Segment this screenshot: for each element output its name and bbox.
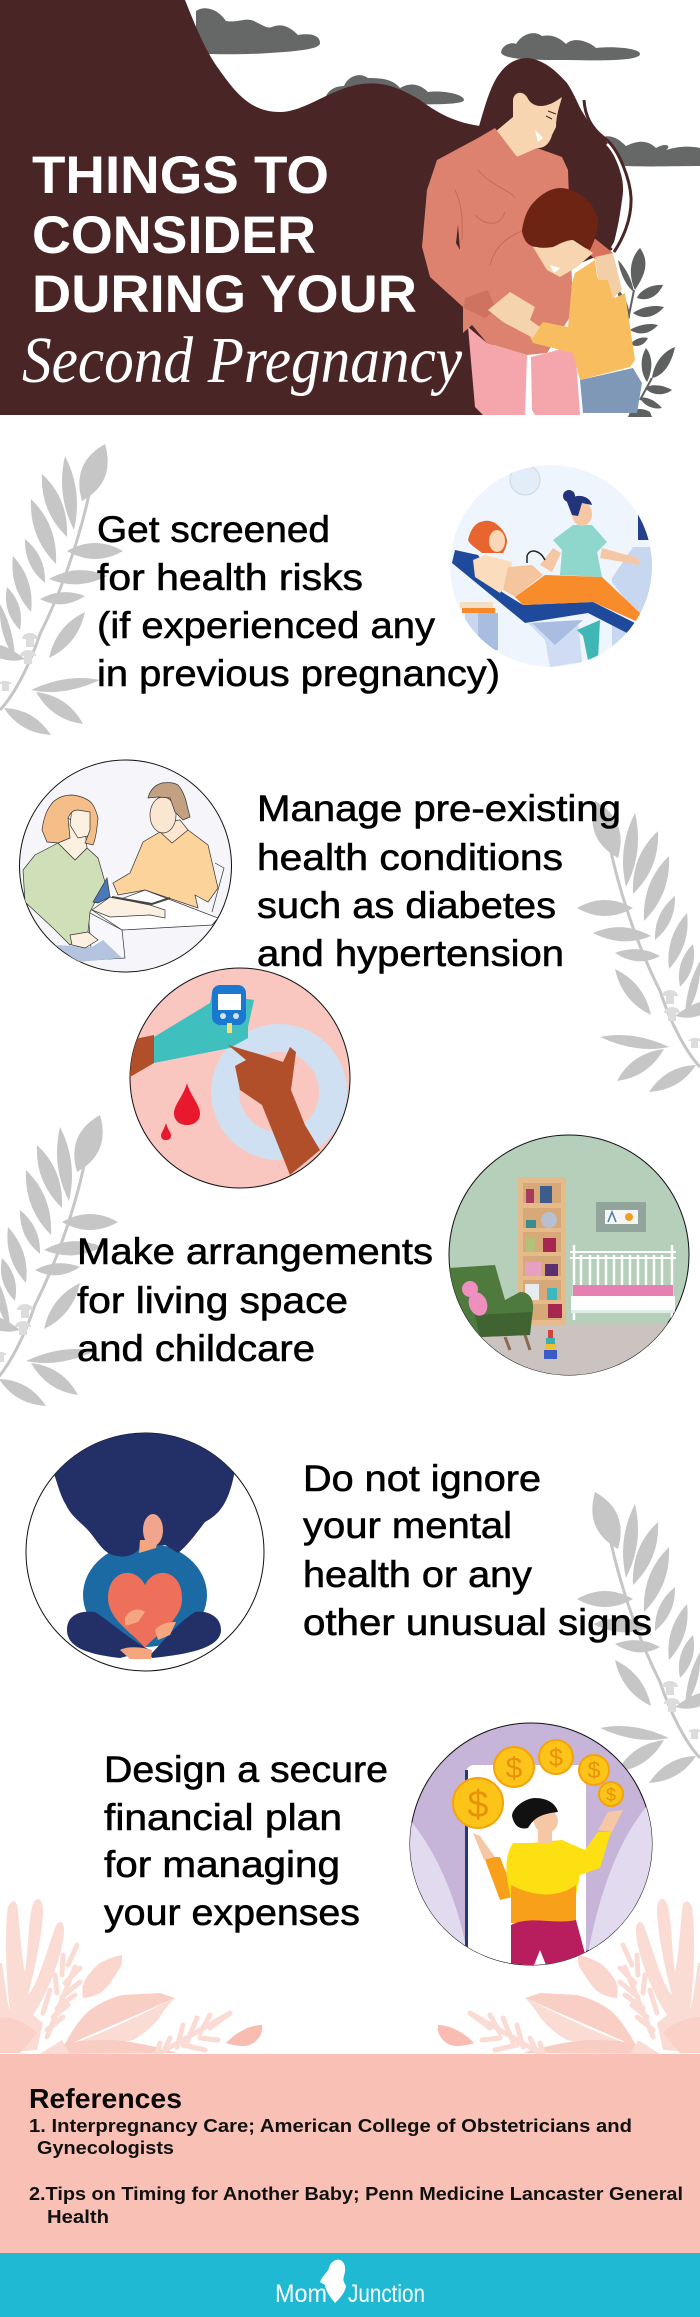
references panel: [0, 2054, 700, 2253]
hair: [478, 58, 623, 280]
reference 1: Gynecologists: [37, 2137, 174, 2158]
logo icon: [320, 2260, 346, 2303]
table: [92, 890, 218, 930]
legs: [67, 1612, 221, 1658]
table front: [88, 912, 125, 960]
point 2 text: such as diabetes: [257, 885, 556, 926]
toy stacker: [544, 1330, 557, 1359]
teal glove: [154, 993, 254, 1063]
probe: [527, 551, 545, 563]
reference 2: [29, 2183, 683, 2227]
ultrasound machine: [612, 547, 652, 617]
left arm: [130, 1035, 154, 1077]
coins: $: [549, 1744, 563, 1772]
hair outer strand: [584, 100, 631, 252]
title: THINGS TO: [32, 146, 329, 205]
blue ring: [225, 1038, 333, 1146]
illustration: glucose test: [130, 968, 350, 1188]
point 2 text: Manage pre-existing: [257, 788, 621, 829]
feet: [120, 1647, 152, 1659]
child smile: [550, 265, 560, 273]
neck: [139, 1540, 158, 1553]
point 5 text: financial plan: [104, 1797, 342, 1838]
woman's eye: [546, 111, 556, 119]
machine base: [612, 626, 630, 646]
woman's hand on belly: [488, 292, 540, 338]
point 4 text: Do not ignore: [303, 1458, 541, 1499]
title: [32, 146, 417, 324]
body: [83, 1543, 207, 1647]
bed: [452, 550, 635, 633]
pedestal shadow: [532, 620, 583, 645]
side table: [460, 602, 498, 650]
floor: [470, 1323, 668, 1375]
point 2 text: and hypertension: [257, 933, 564, 974]
fern: top left: [0, 444, 123, 735]
point 1 text: in previous pregnancy): [97, 653, 500, 694]
bookshelf: [518, 1177, 566, 1325]
bed pedestal: [528, 620, 582, 667]
phone: [466, 1765, 586, 1975]
jumper: [422, 128, 572, 355]
point 3 text: for living space: [77, 1280, 348, 1321]
reference 2: 2.Tips on Timing for Another Baby; Penn Medicine Lancaster General: [29, 2183, 683, 2204]
fern: third left: [0, 1115, 118, 1406]
crib: [570, 1245, 676, 1320]
logo: Mom: [275, 2280, 327, 2308]
point 3 text: [77, 1231, 433, 1369]
coins: [453, 1740, 623, 1828]
arm gap: [456, 225, 460, 250]
plant: [617, 248, 675, 417]
clouds: [196, 8, 700, 166]
patient: [23, 795, 165, 962]
reference 1: 1. Interpregnancy Care; American College of Obstetricians and: [29, 2115, 632, 2136]
picture frame: [596, 1202, 646, 1232]
woman's sleeve behind child: [585, 237, 613, 262]
illustration: nursery: [449, 1135, 690, 1378]
reference 2: Health: [47, 2206, 109, 2227]
fern: fourth right: [577, 1492, 700, 1783]
large blood drop: [174, 1083, 200, 1125]
hair: [40, 1433, 250, 1557]
logo: [275, 2260, 425, 2308]
patient hair: [468, 521, 507, 553]
machine top: [638, 514, 648, 540]
patient belly: [503, 565, 543, 597]
nurse: [540, 490, 640, 660]
illustration: woman hugging heart: [26, 1433, 264, 1671]
child jumper: [530, 260, 635, 380]
coins: $: [467, 1784, 489, 1826]
heart: [108, 1573, 182, 1648]
child face: [533, 240, 593, 277]
dark brown hill shape: [0, 0, 500, 415]
face: [143, 1514, 163, 1546]
point 2 text: health conditions: [257, 837, 563, 878]
point 5 text: your expenses: [104, 1892, 360, 1933]
coins: $: [588, 1757, 601, 1783]
chair: [212, 863, 224, 912]
illustration: blood pressure check: [20, 760, 232, 972]
point 4 text: other unusual signs: [303, 1602, 652, 1643]
point 1 text: (if experienced any: [97, 605, 436, 646]
small blood drop: [161, 1123, 171, 1140]
fern: second right: [577, 801, 700, 1092]
coins: $: [506, 1752, 523, 1785]
header banner: [0, 0, 700, 417]
hands: [125, 1610, 176, 1640]
pink leaves: right: [438, 1899, 700, 2054]
point 4 text: [303, 1458, 652, 1643]
patient legs: [515, 575, 642, 622]
illustration: ultrasound scan: [450, 465, 655, 667]
point 5 text: Design a secure: [104, 1749, 388, 1790]
point 4 text: health or any: [303, 1554, 533, 1595]
point 4 text: your mental: [303, 1505, 512, 1546]
references heading: References: [29, 2083, 182, 2114]
child hair: [522, 188, 598, 250]
pink trousers: [468, 327, 580, 415]
woman: [473, 1798, 623, 1970]
phone edge: [465, 1770, 468, 1960]
nurse: [113, 783, 218, 908]
subtitle script: Second Pregnancy: [22, 324, 463, 397]
title: DURING YOUR: [32, 265, 417, 324]
smile: [535, 130, 543, 142]
coins: $: [606, 1785, 616, 1805]
pink leaves: left: [0, 1899, 262, 2054]
face: [495, 93, 562, 157]
illustration: financial plan: [410, 1723, 652, 1975]
glucose meter: [212, 985, 246, 1033]
leaves: [410, 1800, 652, 1970]
woman's hand on shoulder: [595, 253, 622, 298]
logo: Junction: [348, 2280, 425, 2308]
pricked hand: [228, 1045, 320, 1175]
child jeans: [580, 368, 642, 413]
point 5 text: for managing: [104, 1844, 340, 1885]
illustration: mother and child: [422, 58, 675, 417]
point 1 text: Get screened: [97, 509, 330, 550]
teddy bear: [462, 1281, 488, 1316]
patient face: [489, 530, 505, 552]
title: CONSIDER: [32, 206, 316, 265]
armchair: [449, 1265, 533, 1350]
patient torso: [473, 555, 512, 593]
sleeve cuff: [464, 290, 496, 318]
reference 1: [29, 2115, 632, 2158]
footer bar: [0, 2253, 700, 2317]
jumper folds: [455, 170, 525, 265]
wall clock: [510, 465, 540, 495]
point 3 text: and childcare: [77, 1328, 315, 1369]
hair highlight: [607, 144, 626, 248]
point 5 text: [104, 1749, 388, 1933]
point 1 text: [97, 509, 500, 694]
cuff device: [112, 897, 170, 904]
point 1 text: for health risks: [97, 557, 363, 598]
point 2 text: [257, 788, 621, 974]
point 3 text: Make arrangements: [77, 1231, 433, 1272]
